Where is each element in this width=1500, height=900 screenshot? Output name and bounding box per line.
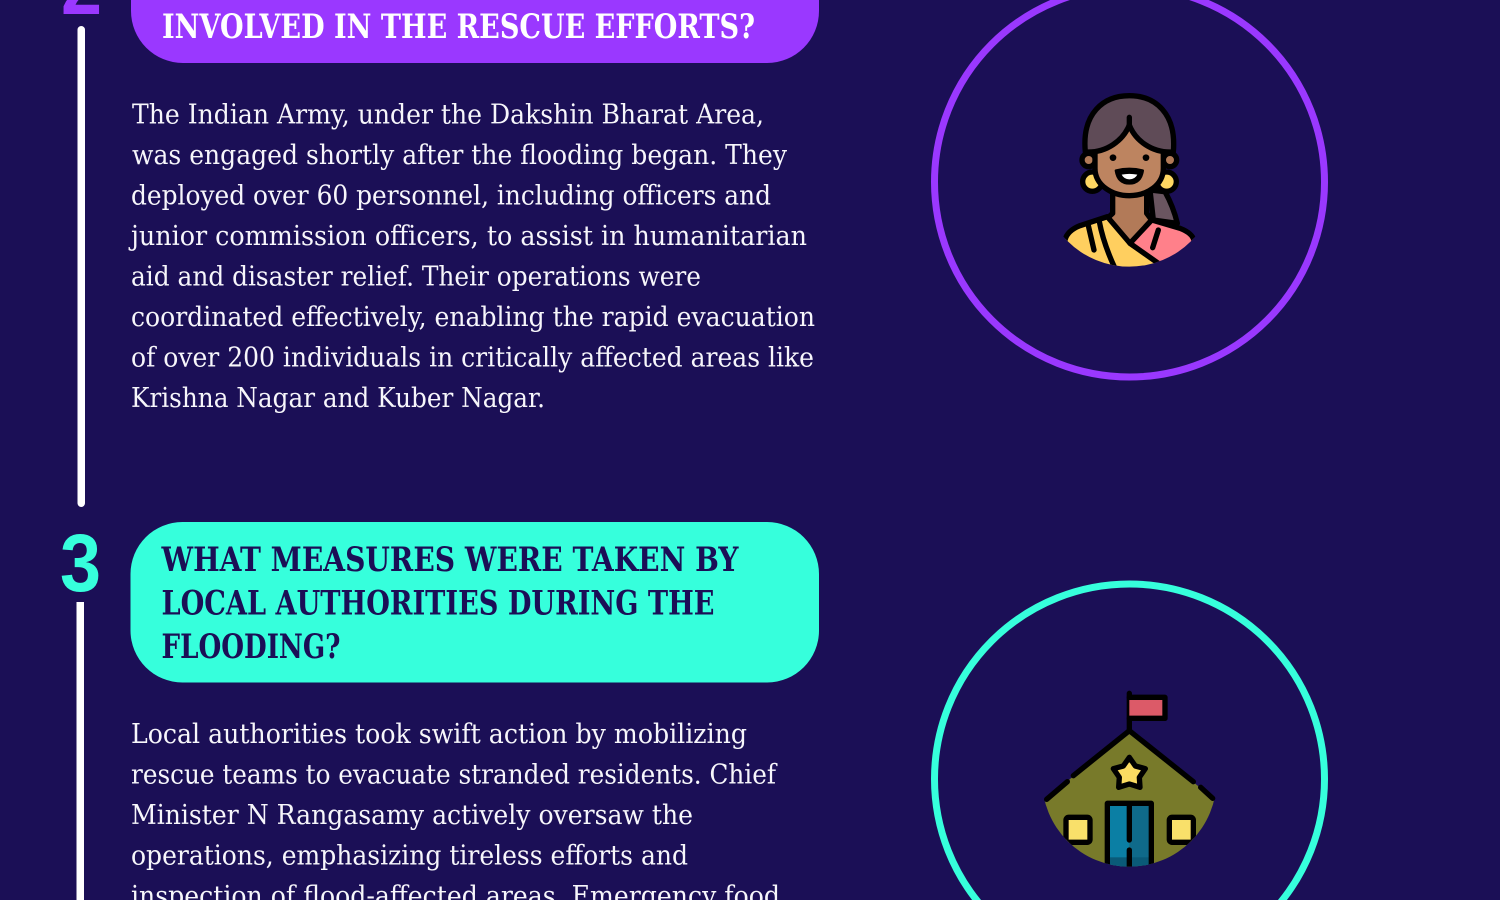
section 2 body text: aid and disaster relief. Their operations were: [131, 262, 701, 292]
section 3 timeline line: [76, 602, 84, 900]
section 3 heading banner: FLOODING?: [162, 627, 340, 667]
section 3 body text: Minister N Rangasamy actively oversaw the: [131, 800, 693, 831]
icon: government building with flag: [1044, 690, 1216, 867]
section 2 body text: Krishna Nagar and Kuber Nagar.: [131, 383, 545, 414]
section 2 icon ring: [934, 0, 1324, 377]
section 2 body text: junior commission officers, to assist in humanitarian: [128, 221, 807, 252]
section 3 icon ring: [934, 584, 1324, 900]
section 2 body text: The Indian Army, under the Dakshin Bharat Area,: [132, 100, 764, 130]
section 3 heading banner: WHAT MEASURES WERE TAKEN BY: [161, 540, 739, 580]
section 3 body text: operations, emphasizing tireless efforts and: [131, 840, 688, 872]
section 2 body text: coordinated effectively, enabling the rapid evacuation: [131, 302, 815, 333]
section 3 body text: rescue teams to evacuate stranded residents. Chief: [131, 760, 778, 790]
section 2 heading banner: INVOLVED IN THE RESCUE EFFORTS?: [162, 7, 755, 47]
section 3 body text: Local authorities took swift action by mobilizing: [131, 719, 747, 750]
section 2 body text: deployed over 60 personnel, including officers and: [131, 180, 771, 212]
section 3 number: 3: [60, 518, 101, 609]
section 3 heading banner: LOCAL AUTHORITIES DURING THE: [162, 584, 714, 624]
section 2 body text: [128, 100, 815, 414]
section 2 body text: of over 200 individuals in critically affected areas like: [131, 342, 814, 374]
icon: woman in sari: [1065, 96, 1194, 280]
section 3 body text: [131, 719, 780, 900]
section 3 heading banner: [130, 522, 819, 682]
section 2 body text: was engaged shortly after the flooding began. They: [132, 140, 788, 171]
section 2 heading banner: [131, 0, 819, 63]
section 2 timeline line: [78, 26, 85, 507]
